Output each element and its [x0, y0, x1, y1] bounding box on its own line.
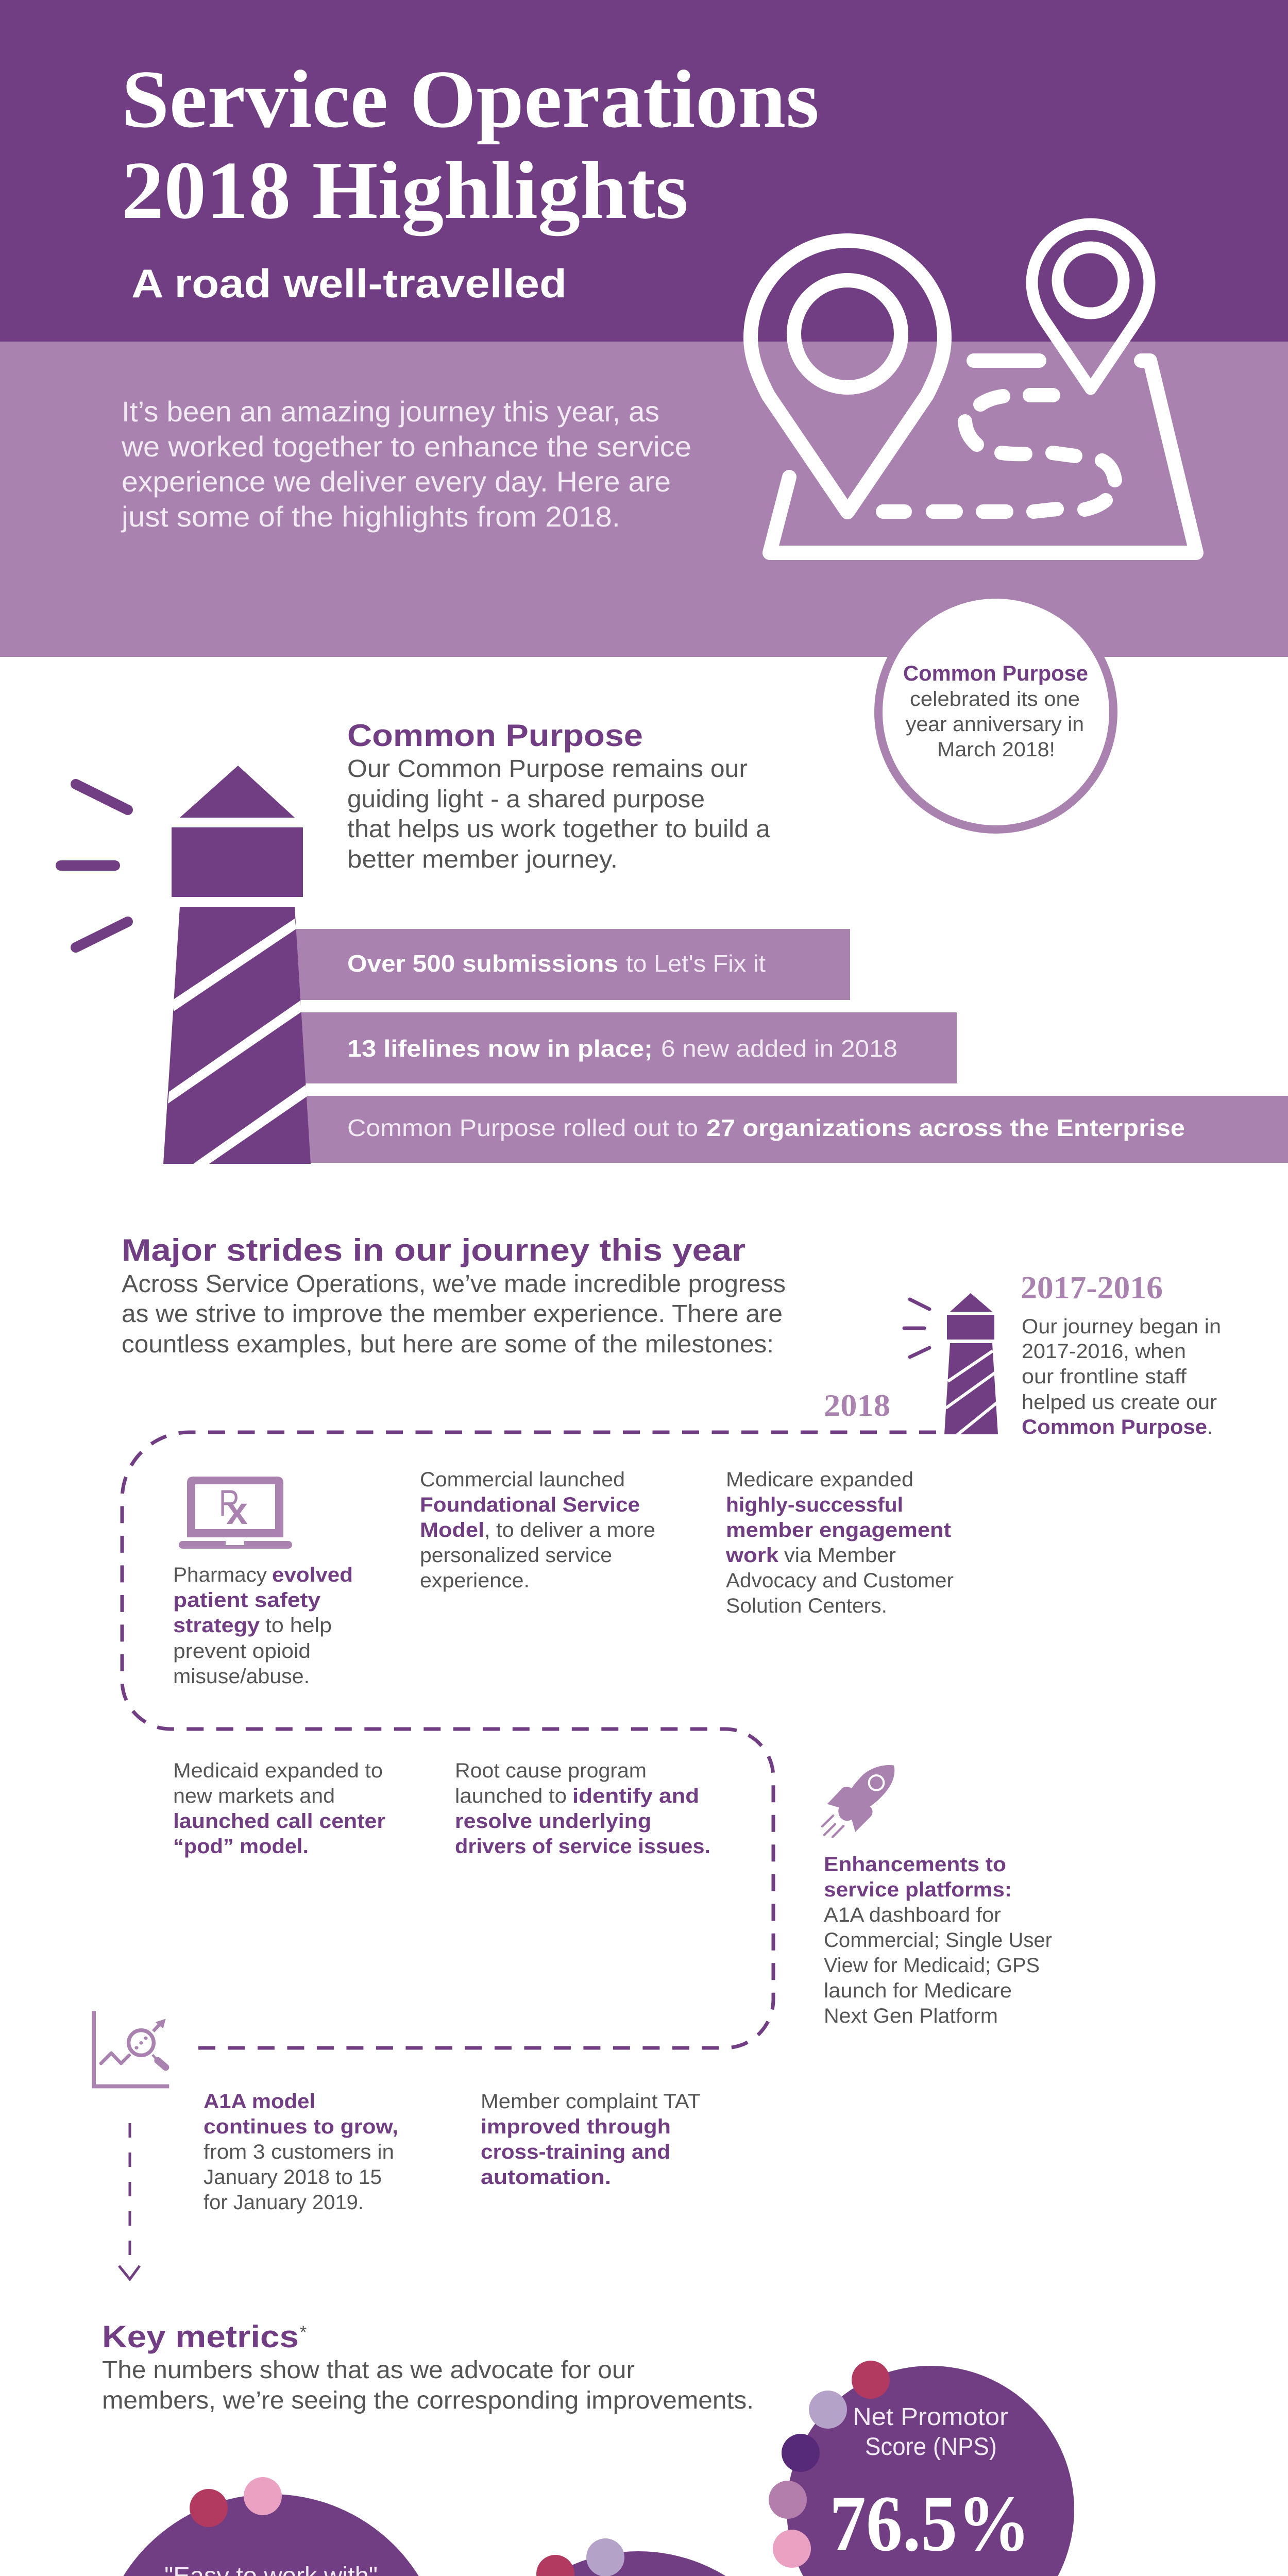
- text block: service platforms: A1A dashboard for: [824, 1904, 1001, 1926]
- icon: lighthouse: [61, 766, 311, 1164]
- text block: medicaid: [173, 1759, 385, 1858]
- icon: laptop rx: x: [226, 1489, 248, 1532]
- text block: journey began: [1022, 1315, 1221, 1438]
- text block: common purpose intro: better member journey.: [347, 846, 618, 873]
- text block: journey began: our frontline staff: [1022, 1365, 1187, 1388]
- callout: anniversary: celebrated its one: [910, 688, 1080, 710]
- text block: pharmacy: patient safety: [173, 1589, 321, 1612]
- text block: root cause: [455, 1759, 710, 1858]
- text block: major strides intro: [122, 1270, 786, 1358]
- heading: major strides: Major strides in our journey this year: [122, 1233, 745, 1267]
- text block: common purpose intro: [347, 755, 770, 873]
- text block: member complaint: cross-training and: [481, 2141, 670, 2163]
- text block: medicare: Solution Centers.: [726, 1595, 887, 1617]
- text block: medicare: highly-successful: [726, 1494, 903, 1516]
- text block: medicaid: “pod” model.: [173, 1835, 309, 1858]
- text block: major strides intro: as we strive to improve the member experience. There are: [122, 1300, 783, 1328]
- text block: medicaid: launched call center: [173, 1810, 385, 1833]
- icon: laptop rx: R: [219, 1483, 240, 1524]
- text block: service platforms: launch for Medicare: [824, 1979, 1012, 2002]
- text block: key metrics intro: The numbers show that as we advocate for our: [102, 2357, 635, 2384]
- text block: commercial: experience.: [420, 1569, 530, 1592]
- text block: root cause: resolve underlying: [455, 1810, 651, 1833]
- title: [122, 53, 819, 236]
- intro text: [121, 395, 691, 533]
- text block: a1a model: for January 2019.: [204, 2191, 364, 2214]
- stat bar: submissions: to Let's Fix it: [626, 950, 766, 977]
- heading: common purpose: Common Purpose: [347, 718, 643, 753]
- text block: key metrics intro: members, we’re seeing the corresponding improvements.: [102, 2387, 754, 2414]
- metric: call quality: [472, 2538, 805, 2576]
- panel: major strides: [92, 1233, 1221, 2279]
- text block: pharmacy: evolved: [272, 1564, 353, 1586]
- text block: commercial: Foundational Service: [420, 1494, 640, 1516]
- icon: rocket: [822, 1765, 894, 1837]
- callout: anniversary: year anniversary in: [906, 713, 1084, 736]
- intro text: we worked together to enhance the service: [121, 430, 691, 463]
- label: 2017-2016: 2017-2016: [1021, 1270, 1163, 1306]
- text block: medicare: Medicare expanded: [726, 1468, 913, 1491]
- text block: pharmacy: strategy: [173, 1614, 260, 1637]
- text block: a1a model: January 2018 to 15: [204, 2166, 382, 2189]
- intro text: experience we deliver every day. Here are: [122, 465, 671, 498]
- text block: member complaint: Member complaint TAT: [481, 2090, 701, 2113]
- text block: common purpose intro: that helps us work together to build a: [347, 816, 770, 843]
- text block: commercial: , to deliver a more: [484, 1519, 655, 1541]
- heading: key metrics: Key metrics: [102, 2319, 299, 2354]
- text block: journey began: .: [1207, 1416, 1213, 1438]
- text block: root cause: launched to: [455, 1785, 567, 1807]
- text block: commercial: [420, 1468, 655, 1592]
- text block: member complaint: improved through: [481, 2115, 671, 2138]
- text block: service platforms: service platforms:: [824, 1878, 1012, 1901]
- text block: journey began: Our journey began in: [1022, 1315, 1221, 1338]
- text block: commercial: Model: [420, 1519, 484, 1541]
- text block: common purpose intro: Our Common Purpose remains our: [347, 755, 748, 783]
- text block: a1a model: [204, 2090, 398, 2214]
- text block: pharmacy: to help: [265, 1614, 332, 1637]
- text block: a1a model: continues to grow,: [204, 2115, 398, 2138]
- title: 2018 Highlights: [122, 144, 688, 236]
- text block: medicare: work: [725, 1544, 779, 1567]
- text block: member complaint: automation.: [481, 2166, 611, 2189]
- text block: medicaid: Medicaid expanded to: [173, 1759, 383, 1782]
- text block: service platforms: View for Medicaid; GPS: [824, 1954, 1040, 1977]
- timeline: dashed road: [122, 1432, 936, 2048]
- text block: major strides intro: Across Service Operations, we’ve made incredible progress: [122, 1270, 786, 1298]
- text block: commercial: Commercial launched: [420, 1468, 625, 1491]
- callout: anniversary: March 2018!: [937, 738, 1055, 761]
- text block: journey began: helped us create our: [1022, 1391, 1217, 1414]
- icon: chart with magnifier: [92, 2011, 169, 2088]
- text block: pharmacy: [173, 1564, 353, 1688]
- text block: member complaint: [481, 2090, 701, 2189]
- text block: a1a model: A1A model: [204, 2090, 315, 2113]
- stat bar: submissions: [294, 929, 850, 1000]
- panel: common purpose: [61, 718, 1288, 1164]
- icon: small lighthouse: [904, 1293, 998, 1435]
- stat bar: organizations: Common Purpose rolled out to: [347, 1114, 698, 1141]
- text block: medicaid: new markets and: [173, 1785, 335, 1807]
- metric: net promotor score: [769, 2361, 1074, 2576]
- text block: commercial: personalized service: [420, 1544, 612, 1567]
- intro text: It’s been an amazing journey this year, as: [122, 395, 659, 428]
- text block: common purpose intro: guiding light - a shared purpose: [347, 786, 705, 813]
- text block: root cause: identify and: [572, 1785, 699, 1807]
- label: 2018: 2018: [824, 1388, 890, 1422]
- metric: easy to work with: [97, 2477, 445, 2576]
- panel: header: [0, 0, 1288, 657]
- stat bar: lifelines: [294, 1012, 957, 1083]
- text block: root cause: Root cause program: [455, 1759, 647, 1782]
- stat bar: lifelines: 6 new added in 2018: [661, 1035, 897, 1062]
- text block: service platforms: Enhancements to: [824, 1853, 1006, 1876]
- stat bar: lifelines: 13 lifelines now in place;: [347, 1035, 653, 1062]
- text block: medicare: via Member: [784, 1544, 896, 1567]
- text block: journey began: Common Purpose: [1022, 1416, 1207, 1438]
- text block: journey began: 2017-2016, when: [1022, 1340, 1186, 1363]
- text block: root cause: drivers of service issues.: [455, 1835, 710, 1858]
- panel: key metrics: [97, 2319, 1211, 2576]
- text block: pharmacy: misuse/abuse.: [173, 1665, 310, 1688]
- metric: net promotor score: 76.5%: [829, 2479, 1030, 2568]
- heading: key metrics: *: [300, 2323, 307, 2342]
- title: Service Operations: [122, 53, 819, 145]
- text block: medicare: [725, 1468, 954, 1617]
- stat bar: organizations: [299, 1096, 1288, 1163]
- text block: medicare: member engagement: [726, 1519, 951, 1541]
- icon: map with location pins: [751, 224, 1196, 553]
- text block: pharmacy: Pharmacy: [173, 1564, 267, 1586]
- text block: service platforms: [824, 1853, 1052, 2027]
- callout: anniversary: Common Purpose: [903, 661, 1088, 685]
- callout: anniversary: [878, 595, 1113, 829]
- stat bar: organizations: 27 organizations across the Enterprise: [706, 1114, 1185, 1141]
- icon: laptop rx: [179, 1477, 292, 1549]
- text block: medicare: Advocacy and Customer: [726, 1569, 954, 1592]
- metric: net promotor score: Score (NPS): [865, 2433, 997, 2461]
- text block: service platforms: Next Gen Platform: [824, 2005, 998, 2027]
- subtitle: A road well-travelled: [131, 261, 567, 306]
- text block: pharmacy: prevent opioid: [173, 1640, 311, 1663]
- text block: key metrics intro: [102, 2357, 754, 2414]
- intro text: just some of the highlights from 2018.: [121, 500, 620, 533]
- stat bar: submissions: Over 500 submissions: [347, 950, 618, 977]
- text block: a1a model: from 3 customers in: [204, 2141, 394, 2163]
- arrow: down to metrics: [119, 2123, 140, 2279]
- metric: net promotor score: Net Promotor: [853, 2403, 1008, 2431]
- text block: major strides intro: countless examples, but here are some of the milestones:: [122, 1331, 774, 1358]
- text block: service platforms: Commercial; Single User: [824, 1929, 1052, 1952]
